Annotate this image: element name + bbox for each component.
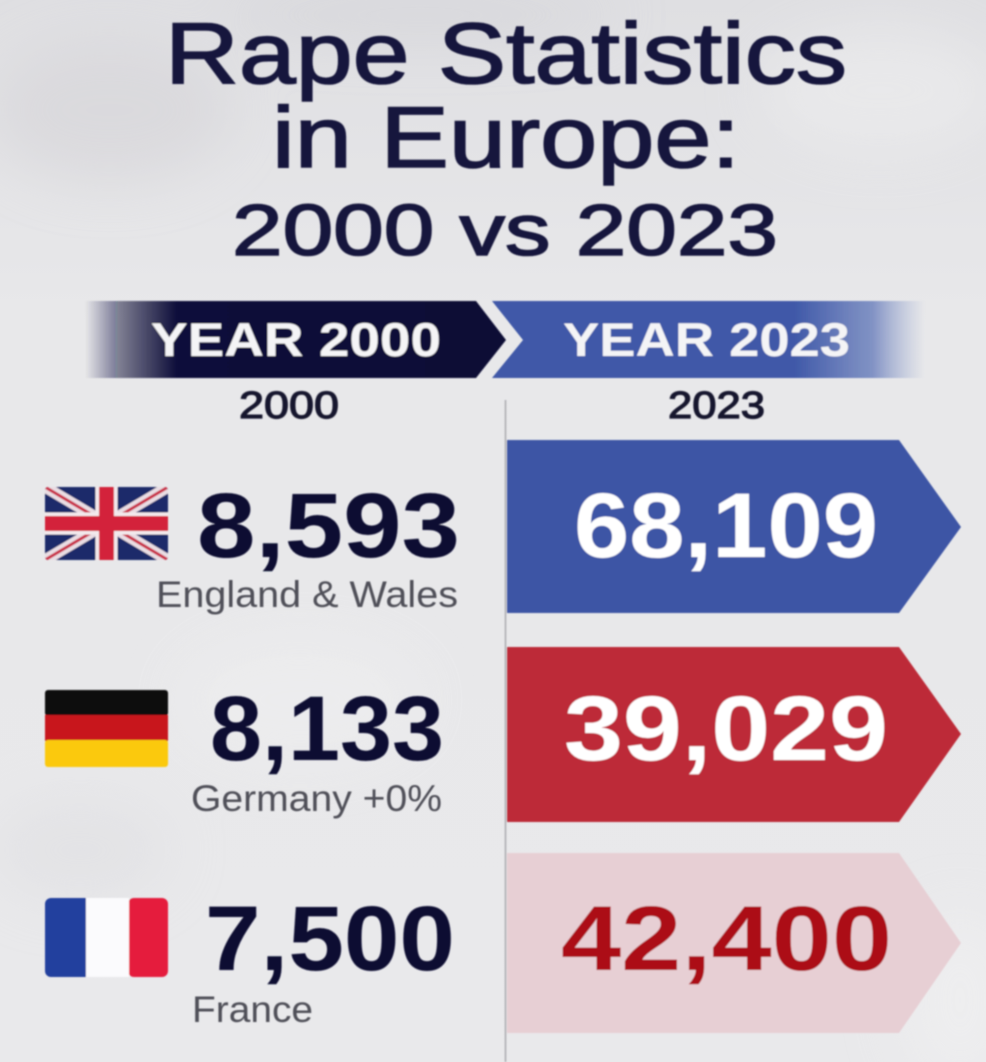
value arrow: France 2023: [507, 853, 961, 1033]
row: France 2000: 7,500: [205, 888, 455, 990]
value arrow: England & Wales 2023: 68,109: [574, 475, 878, 577]
banner: year 2000: [85, 301, 506, 378]
row: Germany 2000: Germany +0%: [191, 778, 442, 819]
icon: German flag: [45, 690, 168, 767]
row: England & Wales 2000: 8,593: [197, 475, 460, 577]
row: Germany 2000: 8,133: [210, 678, 444, 780]
row: Germany 2000: [191, 678, 444, 819]
row: England & Wales 2000: [156, 475, 460, 615]
title: in Europe:: [272, 90, 740, 186]
icon: UK flag: [45, 487, 168, 560]
value arrow: France 2023: 42,400: [561, 888, 892, 990]
row: France 2000: [192, 888, 455, 1030]
value arrow: Germany 2023: [507, 647, 961, 822]
banner: year 2023: YEAR 2023: [563, 313, 850, 366]
row: France 2000: France: [192, 989, 313, 1030]
column heading: 2000: 2000: [239, 385, 339, 427]
value arrow: Germany 2023: 39,029: [564, 678, 888, 780]
row: England & Wales 2000: England & Wales: [156, 574, 458, 615]
icon: French flag: [45, 898, 168, 977]
title: 2000 vs 2023: [232, 191, 778, 271]
column heading: 2023: 2023: [668, 385, 765, 427]
banner: year 2023: [492, 301, 925, 378]
title: [165, 6, 847, 271]
banner: year 2000: YEAR 2000: [151, 313, 441, 366]
value arrow: England & Wales 2023: [507, 440, 961, 613]
title: Rape Statistics: [165, 6, 847, 102]
